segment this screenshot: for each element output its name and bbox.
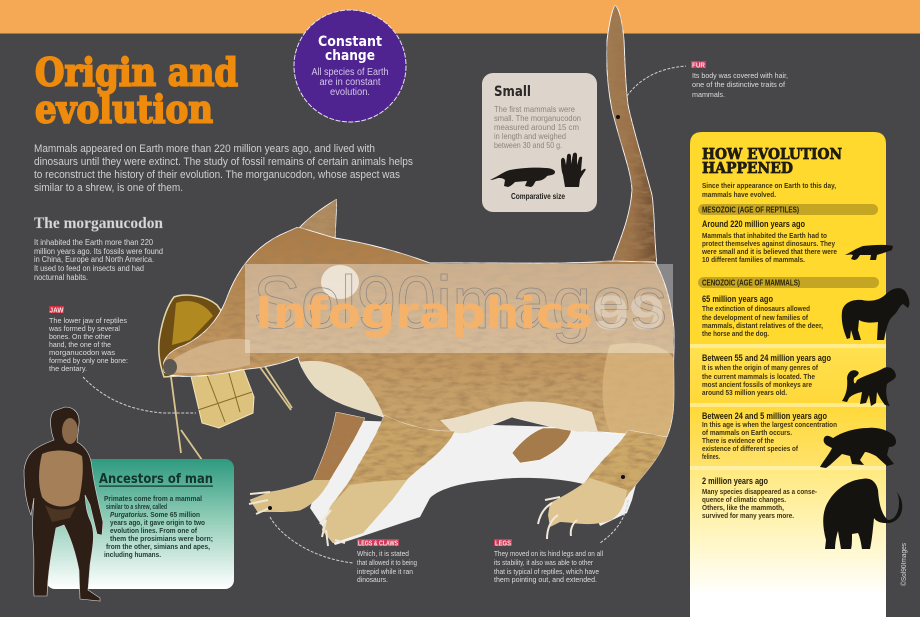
silhouette: horse (842, 288, 909, 340)
nose (163, 359, 177, 375)
entry: 220 million (701, 219, 837, 264)
heading: the morganucodon: The morganucodon (34, 215, 163, 232)
entry: 220 million: protect themselves against dinosaurs. They (702, 239, 836, 248)
white ground shadow (310, 420, 650, 545)
callout: jaw: JAW (50, 306, 64, 314)
entry: 24 to 5 million: existence of different species of (702, 444, 798, 453)
entry: 220 million: Mammals that inhabited the Earth had to (702, 231, 827, 240)
insect prey (159, 295, 292, 460)
callout: jaw: was formed by several (48, 324, 120, 333)
thigh (602, 343, 674, 437)
pale belly fur (440, 402, 598, 433)
title (35, 50, 238, 132)
entry: 24 to 5 million (702, 411, 837, 461)
intro text: to reconstruct the history of their evolution. The morganucodon, whose aspect was (34, 169, 400, 181)
pale chest fur (300, 361, 384, 417)
callout: fur: Its body was covered with hair, (692, 71, 788, 80)
panel: small: between 30 and 50 g. (494, 140, 562, 150)
callout: legs: its stability, it also was able to other (494, 558, 593, 567)
entry: 65 million: the horse and the dog. (702, 329, 769, 338)
entry: 2 million: Many species disappeared as a conse- (702, 487, 817, 496)
icon: morganucodon silhouette (490, 168, 555, 187)
entry: 220 million: were small and it is believed that there were (701, 247, 837, 256)
panel: small: The first mammals were (494, 104, 575, 114)
circle: constant change: are in constant (320, 77, 381, 88)
title: Origin and (35, 50, 238, 94)
entry: 2 million: quence of climatic changes. (702, 495, 786, 504)
circle: constant change: All species of Earth (312, 67, 388, 78)
entry: 55 to 24 million: Between 55 and 24 million years ago (702, 353, 831, 364)
entry: 55 to 24 million (702, 353, 831, 397)
panel intro: mammals have evolved. (702, 190, 776, 199)
near hind leg and foot (585, 430, 667, 520)
panel: ancestors of man: Primates come from a mammal (104, 494, 202, 503)
entry: 24 to 5 million: There is evidence of the (702, 436, 774, 445)
era bar: mesozoic (698, 204, 878, 215)
panel heading: HOW EVOLUTION (702, 146, 842, 163)
silhouette: small mammal (845, 245, 893, 260)
intro text: similar to a shrew, is one of them. (34, 182, 183, 194)
credit text: ©Sol90Images (899, 543, 908, 586)
morganucodon text: million years ago. Its fossils were found (34, 247, 163, 256)
far hind leg (512, 428, 572, 463)
callout: jaw: the dentary. (49, 364, 87, 373)
far front leg and paw (250, 412, 365, 512)
morganucodon text: nocturnal habits. (34, 273, 88, 282)
panel: small: measured around 15 cm (494, 122, 579, 132)
era bar: cenozoic: CENOZOIC (AGE OF MAMMALS) (702, 278, 800, 288)
panel heading: HAPPENED (702, 160, 793, 177)
tail (607, 5, 657, 264)
intro text: dinosaurs until they were extinct. The study of fossil remains of certain animals helps (34, 156, 413, 168)
entry: 2 million (702, 476, 817, 520)
intro text (34, 143, 413, 194)
callout: legs and claws (268, 506, 417, 584)
silhouette: mammoth (823, 478, 902, 549)
panel heading (702, 146, 842, 177)
callout dot on tail (616, 115, 620, 119)
panel: ancestors of man: years ago, it gave origin to two (110, 518, 205, 527)
entry: 24 to 5 million: felines. (702, 452, 720, 461)
morganucodon text (34, 238, 163, 282)
callout: jaw: formed by only one bone: (49, 356, 128, 365)
panel: small: Small (494, 84, 531, 100)
era bar: cenozoic (698, 277, 879, 288)
top orange band (0, 0, 920, 34)
panel: ancestors of man: including humans. (104, 550, 161, 559)
ear (298, 199, 337, 240)
entry: 220 million: Around 220 million years ago (702, 219, 805, 230)
callout: legs and claws: that allowed it to being (357, 558, 417, 567)
morganucodon text: It used to feed on insects and had (34, 264, 144, 273)
watermark: Sol90images (253, 261, 667, 344)
callout: legs: LEGS (495, 538, 511, 548)
intro text: Mammals appeared on Earth more than 220 million years ago, and lived with (34, 143, 375, 155)
illustration: human ancestor (24, 407, 103, 601)
callout: legs (494, 475, 628, 584)
snout highlight (172, 339, 250, 373)
callout: jaw: bones. On the other (49, 332, 111, 341)
panel: ancestors of man: evolution lines. From one of (110, 526, 197, 535)
callout: fur: one of the distinctive traits of (692, 80, 786, 89)
circle: constant change: evolution. (330, 87, 370, 98)
entry: 2 million: 2 million years ago (702, 476, 768, 487)
callout: legs and claws: intrepid while it ran (357, 567, 413, 576)
panel: ancestors of man: them the prosimians were born; (110, 534, 213, 543)
silhouette: sabre-tooth cat (820, 428, 896, 468)
callout: legs: that is typical of reptiles, which have (494, 567, 599, 576)
panel intro (702, 181, 836, 199)
entry: 24 to 5 million: of mammals on Earth occurs. (702, 428, 792, 437)
callout: legs: them pointing out, and extended. (494, 575, 597, 584)
entry: 65 million: mammals, distant relatives of the deer, (702, 321, 823, 330)
era bar: mesozoic: MESOZOIC (AGE OF REPTILES) (702, 206, 799, 214)
body and head (163, 227, 674, 437)
morganucodon text: It inhabited the Earth more than 220 (34, 238, 154, 247)
circle: constant change (294, 10, 406, 122)
callout: legs and claws: LEGS & CLAWS (358, 538, 398, 548)
panel: ancestors of man: similar to a shrew, called (106, 502, 167, 511)
panel: small: small. The morganucodon (494, 113, 581, 123)
entry: 220 million: 10 different families of mammals. (702, 255, 805, 264)
entry: 24 to 5 million: Between 24 and 5 million years ago (702, 411, 827, 422)
entry: 65 million: the development of new families of (702, 313, 808, 322)
entry: 55 to 24 million: around 53 million years old. (702, 388, 787, 397)
panel: ancestors of man: Ancestors of man (99, 471, 213, 487)
callout: jaw (48, 306, 196, 413)
callout: jaw: The lower jaw of reptiles (49, 316, 127, 325)
morganucodon text: in China, Europe and North America. (34, 255, 154, 264)
callout: legs and claws: dinosaurs. (357, 575, 388, 584)
panel: small: in length and weighed (494, 131, 566, 141)
panel: how evolution happened (690, 132, 909, 617)
panel: small: Comparative size (511, 191, 565, 201)
entry: 55 to 24 million: the current mammals is located. The (702, 372, 815, 381)
circle: constant change: change (325, 48, 375, 64)
entry: 65 million: 65 million years ago (702, 294, 773, 305)
watermark: Infographics (255, 288, 593, 339)
callout: fur: FUR (692, 60, 705, 70)
entry: 55 to 24 million: most ancient fossils of monkeys are (702, 380, 812, 389)
callout: fur: mammals. (692, 90, 725, 99)
circle: constant change: Constant (318, 34, 382, 50)
panel: small (482, 73, 597, 212)
watermark: 99 (593, 287, 665, 340)
entry: 65 million (702, 294, 823, 338)
panel: ancestors of man: Purgatorius. Some 65 million (110, 510, 200, 519)
entry: 65 million: The extinction of dinosaurs allowed (702, 304, 810, 313)
near front leg and paw (322, 415, 455, 543)
silhouette: monkey (842, 367, 896, 406)
panel: ancestors of man: from the other, simians and apes, (106, 542, 210, 551)
panel: ancestors of man (46, 459, 234, 589)
callout: jaw: hand, the one of the (49, 340, 111, 349)
callout: jaw: morganucodon was (49, 348, 115, 357)
entry: 2 million: survived for many years more. (702, 511, 794, 520)
callout: fur (627, 60, 788, 99)
callout: legs: They moved on its hind legs and on all (494, 549, 603, 558)
icon: hand silhouette (561, 153, 586, 187)
title: evolution (35, 86, 213, 132)
callout: legs and claws: Which, it is stated (357, 549, 409, 558)
illustration: morganucodon (159, 5, 674, 546)
entry: 55 to 24 million: It is when the origin of many genres of (702, 363, 818, 372)
entry: 24 to 5 million: In this age is when the largest concentration (702, 420, 837, 429)
panel intro: Since their appearance on Earth to this day, (702, 181, 836, 190)
entry: 2 million: Others, like the mammoth, (702, 503, 784, 512)
